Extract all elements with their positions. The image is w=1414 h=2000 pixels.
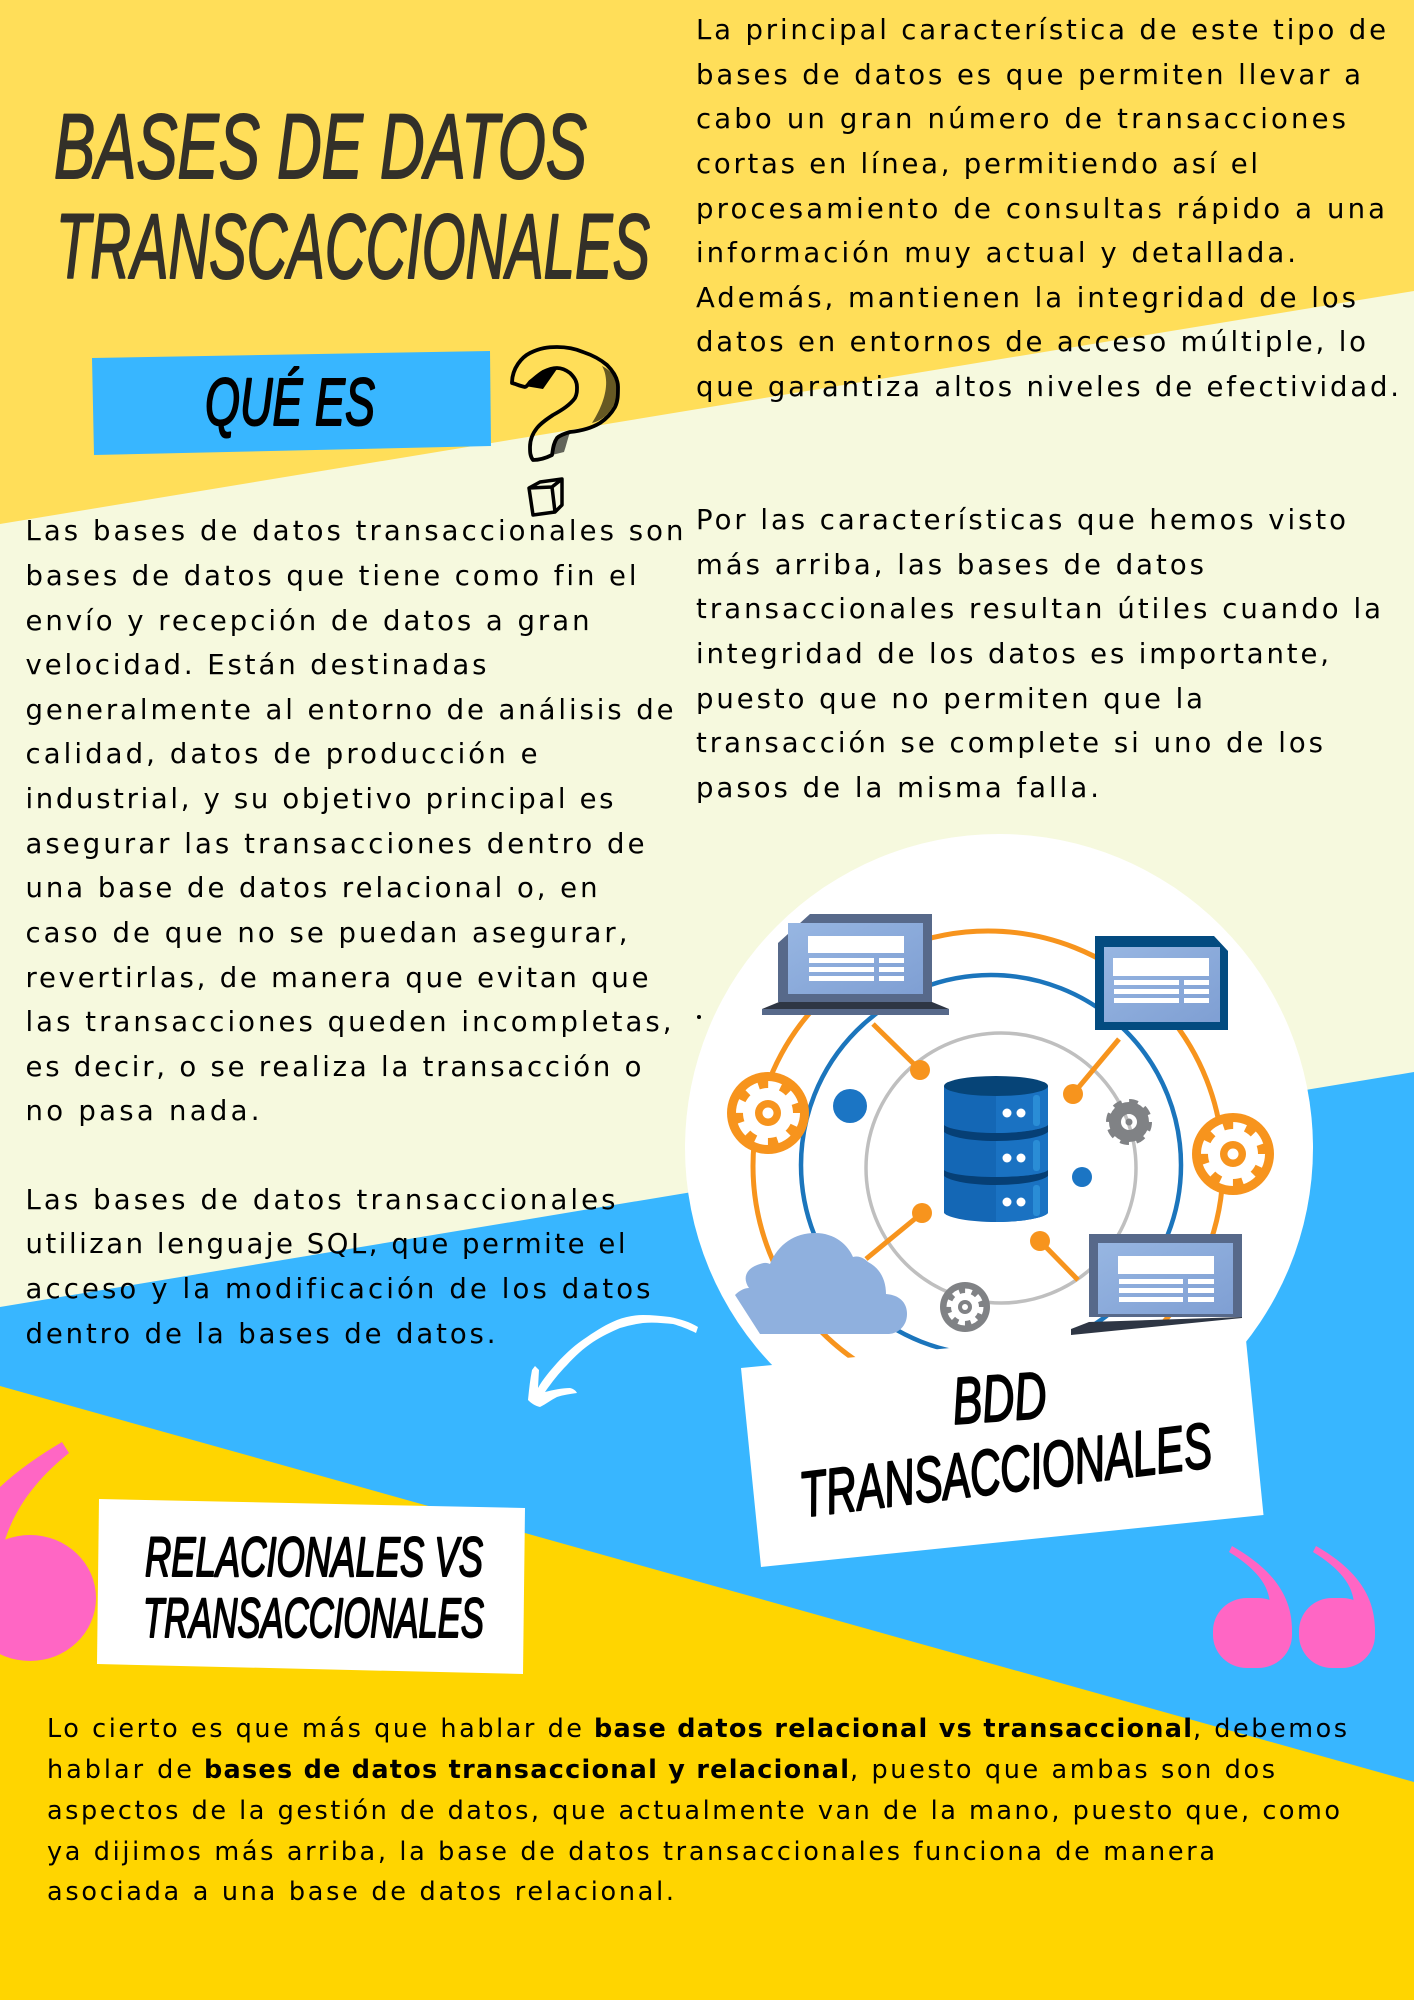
text block: definition left: Las bases de datos transaccionales son [26, 515, 683, 547]
text block: relacional vs transaccional: , puesto que ambas son dos [850, 1755, 1275, 1785]
icon: database cylinder [944, 1076, 1048, 1222]
title [54, 96, 650, 298]
icon: cloud [735, 1233, 907, 1334]
text block: SQL: acceso y la modificación de los datos [26, 1273, 650, 1305]
heading panel: relacionales vs transaccionales [97, 1499, 525, 1674]
text block: definition left: asegurar las transacciones dentro de [26, 828, 644, 860]
blue dots [833, 1089, 1092, 1187]
heading panel: BDD transaccionales: BDD [950, 1358, 1049, 1438]
text block: definition left: envío y recepción de datos a gran [26, 605, 590, 637]
title: BASES DE DATOS [54, 96, 587, 198]
text block: definition intro right [696, 14, 1399, 403]
icon: opening quote [0, 1442, 96, 1661]
text block: definition left: las transacciones queden incompletas, [26, 1006, 672, 1038]
text block: usefulness right: más arriba, las bases de datos [696, 549, 1204, 581]
text block: relacional vs transaccional: base datos relacional vs transaccional [594, 1714, 1192, 1744]
text block: definition intro right: La principal característica de este tipo de [696, 14, 1386, 46]
text block: definition intro right: cortas en línea, permitiendo así el [696, 148, 1258, 180]
text block: definition left [26, 515, 683, 1127]
text block: relacional vs transaccional: ya dijimos más arriba, la base de datos transaccionales funciona de manera [47, 1837, 1215, 1867]
icon: closing quote [1213, 1546, 1375, 1668]
text block: relacional vs transaccional: Lo cierto es que más que hablar de [47, 1714, 582, 1744]
text block: relacional vs transaccional: asociada a una base de datos relacional. [47, 1877, 674, 1907]
icon: question mark [512, 347, 618, 515]
text block: SQL [26, 1184, 650, 1350]
text block: relacional vs transaccional: , debemos [1193, 1714, 1347, 1744]
illustration: database network [685, 834, 1313, 1365]
text block: definition intro right: procesamiento de consultas rápido a una [696, 193, 1385, 225]
text block: usefulness right: transaccionales resultan útiles cuando la [696, 593, 1381, 625]
arrow [528, 1315, 698, 1407]
text block: definition intro right: datos en entornos de acceso múltiple, lo [696, 326, 1366, 358]
text block: SQL: Las bases de datos transaccionales [26, 1184, 616, 1216]
text block: usefulness right: integridad de los datos es importante, [696, 638, 1329, 670]
text block: relacional vs transaccional: hablar de [47, 1755, 192, 1785]
icon: monitor top right [1095, 936, 1228, 1030]
icon: laptop bottom right [1071, 1234, 1242, 1335]
heading panel: qué es [92, 351, 491, 455]
text block: definition left: caso de que no se puedan asegurar, [26, 917, 628, 949]
text block: definition left: calidad, datos de producción e [26, 738, 538, 770]
text block: relacional vs transaccional: bases de datos transaccional y relacional [204, 1755, 849, 1785]
text block: definition left: bases de datos que tiene como fin el [26, 560, 636, 592]
text block: relacional vs transaccional [47, 1714, 1347, 1907]
heading panel: qué es: QUÉ ES [205, 365, 375, 440]
icon: grey ring gear [940, 1282, 990, 1332]
text block: definition left: es decir, o se realiza la transacción o [26, 1051, 641, 1083]
icon: orange gear right [1192, 1113, 1274, 1195]
icon: grey gear [1109, 1102, 1149, 1142]
text block: relacional vs transaccional: aspectos de la gestión de datos, que actualmente van de la mano, puesto que, como [47, 1796, 1340, 1826]
heading panel: relacionales vs transaccionales: RELACIONALES VS [145, 1525, 483, 1588]
text block: definition left: una base de datos relacional o, en [26, 872, 598, 904]
connectors [866, 1024, 1119, 1280]
text block: definition intro right: cabo un gran número de transacciones [696, 103, 1346, 135]
text block: definition left: industrial, y su objetivo principal es [26, 783, 614, 815]
text block: usefulness right: pasos de la misma falla. [696, 772, 1099, 804]
text block: usefulness right [696, 504, 1381, 804]
text block: SQL: dentro de la bases de datos. [26, 1318, 496, 1350]
text block: definition intro right: Además, mantienen la integridad de los [696, 282, 1356, 314]
text block: definition left: velocidad. Están destinadas [26, 649, 486, 681]
text block: SQL: utilizan lenguaje SQL, que permite el [26, 1228, 626, 1260]
icon: laptop top left [762, 914, 949, 1015]
text block: definition intro right: bases de datos es que permiten llevar a [696, 59, 1361, 91]
icon: orange gear left [727, 1072, 809, 1154]
heading panel: BDD transaccionales [741, 1320, 1264, 1567]
stray period [697, 1015, 701, 1019]
text block: definition left: no pasa nada. [26, 1095, 260, 1127]
text block: usefulness right: transacción se complete si uno de los [696, 727, 1323, 759]
text block: definition left: generalmente al entorno de análisis de [26, 694, 673, 726]
text block: definition intro right: información muy actual y detallada. [696, 237, 1296, 269]
text block: usefulness right: puesto que no permiten que la [696, 683, 1203, 715]
heading panel: relacionales vs transaccionales: TRANSACCIONALES [143, 1586, 484, 1649]
text block: usefulness right: Por las características que hemos visto [696, 504, 1346, 536]
heading panel: BDD transaccionales: TRANSACCIONALES [796, 1409, 1216, 1531]
text block: definition intro right: que garantiza altos niveles de efectividad. [696, 371, 1399, 403]
text block: definition left: revertirlas, de manera que evitan que [26, 962, 648, 994]
title: TRANSCACCIONALES [56, 196, 650, 298]
